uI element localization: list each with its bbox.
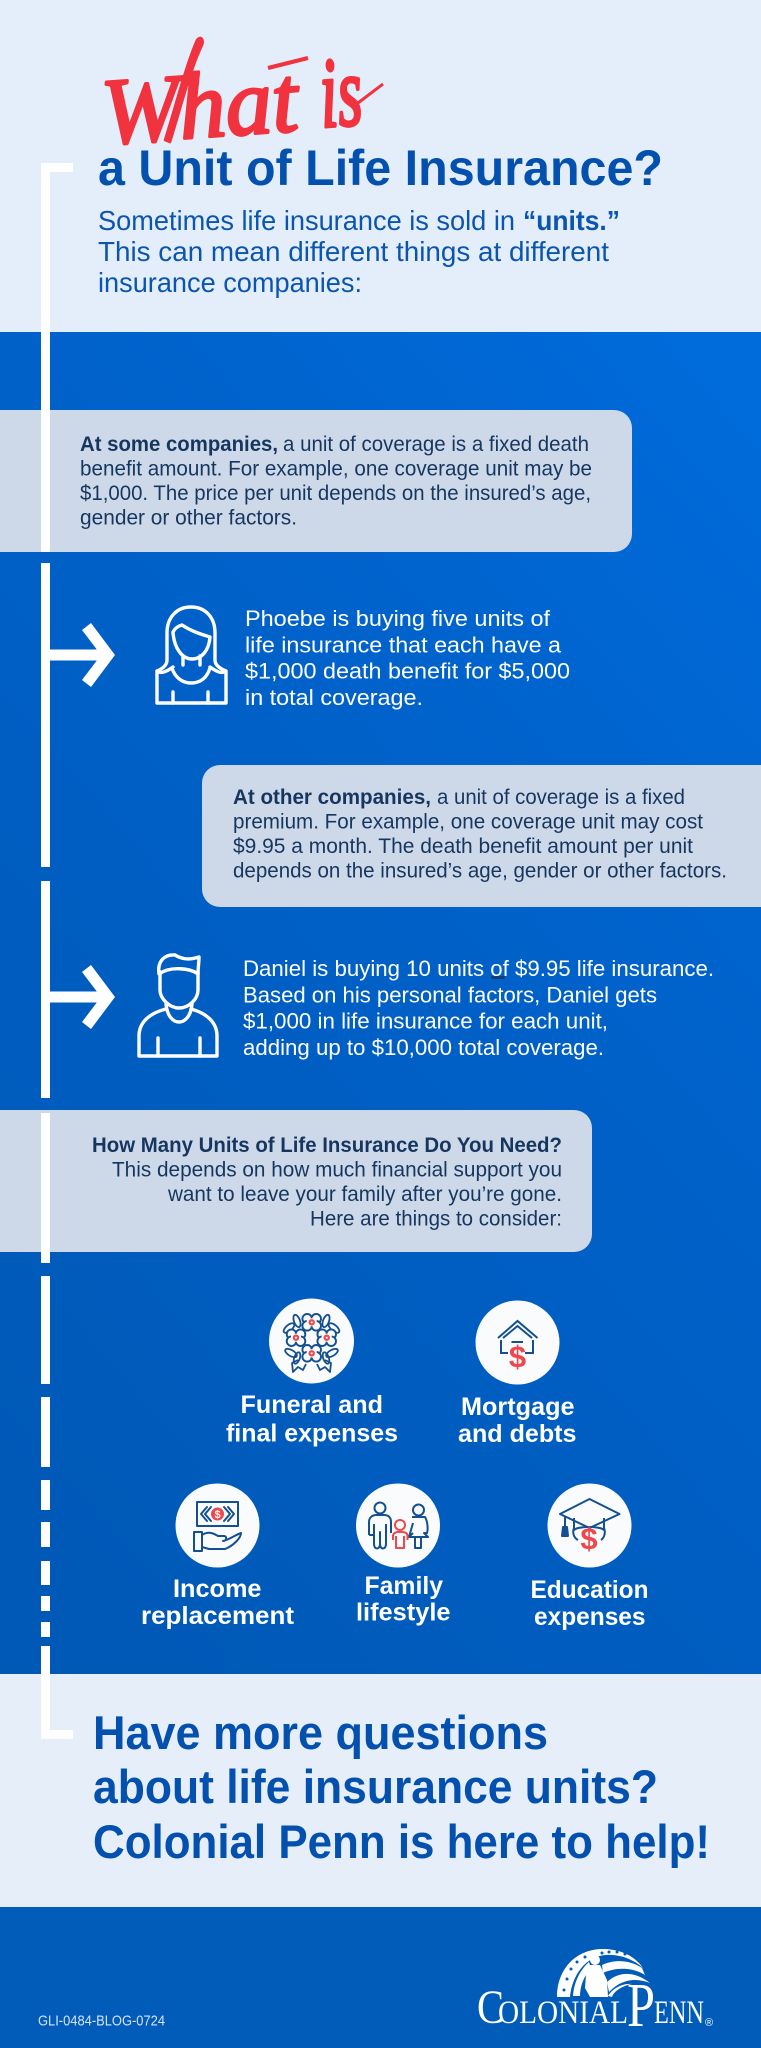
call to action heading: about life insurance units? [93,1760,658,1813]
text: Phoebe example: $1,000 death benefit for $5,000 [245,658,570,684]
text: Phoebe example: life insurance that each have a [245,632,562,658]
text: how many units: How Many Units of Life Insurance Do You Need? [92,1134,562,1157]
text: at other companies: At other companies, [233,786,431,809]
intro text: “units.” [523,205,620,236]
timeline line [41,163,73,1739]
call to action heading: Have more questions [93,1706,548,1759]
title [98,37,663,196]
text: at some companies: a unit of coverage is a fixed death [283,433,589,456]
label: income replacement [141,1575,295,1630]
background: footer band [0,1907,761,2048]
background: bottom light panel [0,1674,761,1907]
label: family lifestyle [356,1572,451,1626]
text: Daniel example: adding up to $10,000 total coverage. [243,1035,604,1060]
label: income replacement: Income [173,1575,262,1603]
text: at other companies [233,786,727,882]
text: at some companies [80,433,592,530]
icon: floral wreath [269,1298,354,1384]
logo wordmark: C [477,1981,504,2034]
reference code: GLI-0484-BLOG-0724 [38,2014,165,2030]
title main line: a Unit of Life Insurance? [98,140,663,196]
text: at some companies: benefit amount. For example, one coverage unit may be [80,458,592,480]
item: education expenses [530,1484,648,1631]
item: family lifestyle [356,1484,451,1626]
icon: family [356,1484,440,1568]
text: Phoebe example: Phoebe is buying five units of [245,606,551,631]
label: mortgage and debts [458,1393,576,1448]
text: at other companies: premium. For example, one coverage unit may cost [233,810,703,834]
logo wordmark: ENN [654,1995,704,2031]
text: how many units [92,1134,562,1230]
logo wordmark: OLONIAL [498,1995,628,2031]
smudge under of [491,976,505,979]
label: funeral and final expenses: final expenses [226,1420,398,1448]
text: Daniel example: $1,000 in life insurance for each unit, [243,1008,608,1034]
text: at other companies: a unit of coverage is a fixed [437,786,685,809]
icon: woman [157,607,226,703]
item: funeral and final expenses [226,1298,398,1448]
text: Daniel example [243,956,714,1060]
arrow: to Phoebe [50,623,115,687]
white line over panel [41,1113,50,1263]
icon: house with dollar [476,1300,560,1384]
icon: graduation cap with dollar [548,1484,632,1568]
title script: What is: is [316,37,365,150]
text: how many units: want to leave your family after you’re gone. [167,1183,562,1206]
call to action heading [93,1706,710,1868]
label: funeral and final expenses [226,1391,398,1448]
logo emblem [557,1949,650,1997]
intro text [98,205,620,298]
text: at some companies: At some companies, [80,433,278,456]
background: blue main panel [0,332,761,1674]
icon: man [139,955,217,1056]
icon: house with dollar: $ [509,1339,526,1374]
panel: at other companies [202,765,761,907]
label: family lifestyle: lifestyle [356,1598,451,1626]
text: at some companies: $1,000. The price per unit depends on the insured’s age, [80,482,591,505]
label: funeral and final expenses: Funeral and [240,1391,383,1419]
item: income replacement [141,1484,295,1630]
label: mortgage and debts: Mortgage [461,1393,575,1421]
label: education expenses: Education [530,1576,648,1604]
label: education expenses [530,1576,648,1631]
label: income replacement: replacement [141,1602,295,1630]
intro text: This can mean different things at different [98,236,609,267]
intro text: insurance companies: [98,267,362,298]
logo: Colonial Penn [477,1949,713,2040]
icon: graduation cap with dollar: $ [580,1521,598,1556]
text: at other companies: $9.95 a month. The death benefit amount per unit [233,835,693,858]
text: Daniel example: Daniel is buying 10 units of $9.95 life insurance. [243,956,714,981]
text: Phoebe example [245,606,570,710]
label: mortgage and debts: and debts [458,1420,576,1448]
logo wordmark: P [627,1972,655,2040]
item: mortgage and debts [458,1300,576,1448]
background: top light panel [0,0,761,332]
label: education expenses: expenses [534,1603,646,1631]
title script: What is: What [98,47,304,165]
call to action heading: Colonial Penn is here to help! [93,1815,710,1868]
icon: money in hand [176,1484,260,1568]
text: at some companies: gender or other factors. [80,506,297,530]
text: Phoebe example: in total coverage. [245,685,423,710]
intro text: Sometimes life insurance is sold in [98,205,515,236]
label: family lifestyle: Family [364,1572,443,1600]
logo wordmark: ® [705,2017,713,2029]
arrow: to Daniel [50,965,115,1029]
logo wordmark [477,1972,713,2040]
text: how many units: This depends on how much financial support you [112,1158,562,1182]
title script: What is [98,37,383,165]
text: at other companies: depends on the insured’s age, gender or other factors. [233,860,727,882]
text: Daniel example: Based on his personal factors, Daniel gets [243,982,657,1008]
panel: how many units [0,1110,592,1263]
panel: at some companies [0,410,632,552]
text: how many units: Here are things to consider: [310,1208,562,1230]
icon: money in hand: $ [214,1509,221,1521]
